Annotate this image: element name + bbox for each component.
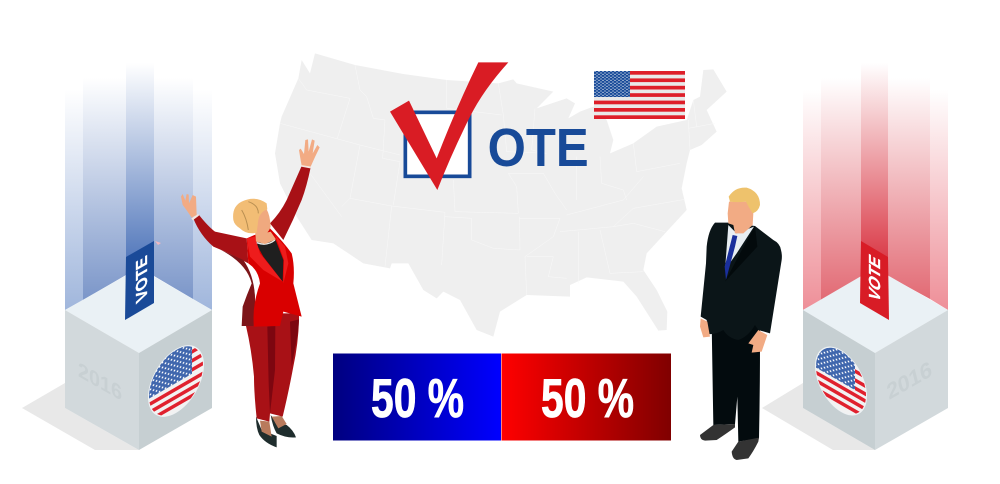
- icon: American flag: [594, 71, 685, 119]
- small pink mark: [155, 241, 161, 245]
- blue 50 percent: 50 %: [371, 367, 464, 429]
- raised arms: [191, 165, 311, 326]
- panel: left ballot box: [22, 63, 212, 450]
- icon: round flag: [148, 345, 204, 417]
- map of the United States: [275, 53, 727, 337]
- box body: [803, 268, 948, 450]
- jacket: [247, 228, 302, 327]
- ballot checkbox: [405, 112, 470, 176]
- 2016 label: 2016: [78, 357, 122, 406]
- logo: VOTE with check mark: [390, 62, 589, 190]
- icon: raised hands: [181, 139, 320, 218]
- hands: [700, 318, 767, 353]
- red check mark: [390, 62, 508, 190]
- trousers: [712, 323, 760, 442]
- shoes: [700, 424, 759, 460]
- woman in red suit: [181, 139, 320, 447]
- red 50 percent: 50 %: [541, 367, 634, 429]
- blue VOTE ballot: [125, 241, 154, 320]
- results bar: [333, 354, 671, 440]
- box body: [65, 268, 212, 450]
- red light beams: [803, 63, 948, 310]
- red VOTE ballot: [860, 241, 889, 320]
- head and hair: [728, 188, 760, 233]
- man in black suit: [700, 188, 782, 460]
- shadow of left box: [22, 383, 139, 450]
- icon: round flag: [815, 346, 867, 416]
- jacket: [701, 223, 782, 340]
- 2016 label: 2016: [884, 356, 934, 405]
- panel: right ballot box: [762, 63, 948, 450]
- word OTE: OTE: [488, 118, 589, 178]
- red VOTE ballot: VOTE: [865, 251, 884, 305]
- shadow of right box: [762, 383, 875, 450]
- red 50 percent: [502, 354, 671, 440]
- blue light beams: [65, 63, 212, 310]
- blue 50 percent: [333, 354, 501, 440]
- legs and shoes: [246, 313, 299, 447]
- head and hair: [233, 199, 276, 244]
- blue VOTE ballot: VOTE: [132, 252, 151, 307]
